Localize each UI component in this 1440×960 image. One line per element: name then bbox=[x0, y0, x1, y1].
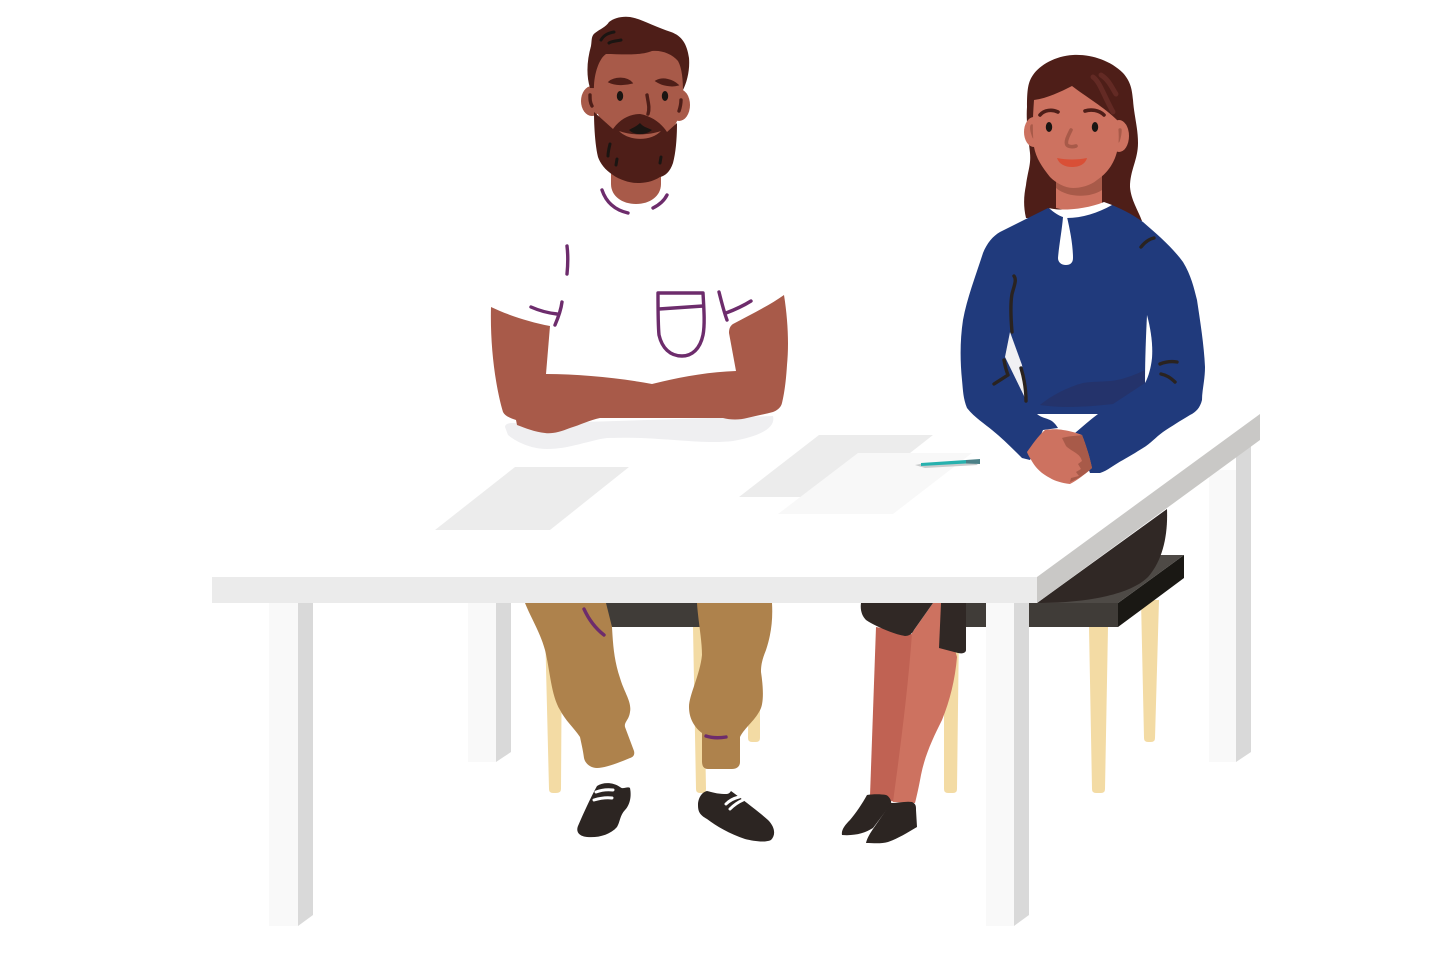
woman's thighs on seat bbox=[1037, 509, 1167, 603]
man: shirt details and pocket bbox=[531, 246, 751, 356]
back table legs bbox=[468, 440, 1251, 762]
man: left shoe bbox=[577, 783, 631, 837]
woman: shoes bbox=[842, 794, 917, 843]
eyes bbox=[617, 91, 623, 101]
man: trousers bbox=[525, 603, 772, 769]
man: arm shadow on table bbox=[505, 416, 773, 449]
woman: face bbox=[1033, 86, 1119, 188]
woman: ears bbox=[1024, 117, 1129, 152]
table bbox=[212, 300, 1260, 926]
table front edge bbox=[212, 577, 1037, 603]
front left leg bbox=[269, 603, 313, 926]
ears bbox=[581, 86, 603, 116]
woman: face features bbox=[1040, 75, 1116, 167]
chair seat: man bbox=[604, 603, 702, 627]
ear lines bbox=[590, 95, 681, 111]
man: arms bbox=[491, 295, 788, 433]
mouth bbox=[619, 131, 661, 139]
woman: hair bbox=[1024, 55, 1142, 221]
eyebrows bbox=[609, 78, 632, 84]
beard strands bbox=[608, 144, 661, 165]
man: right shoe bbox=[698, 791, 774, 842]
man: head bbox=[581, 17, 690, 183]
woman: neck bbox=[1056, 170, 1102, 213]
paper: front left bbox=[435, 467, 629, 530]
nose bbox=[647, 95, 649, 114]
woman: collar and keyhole bbox=[1049, 202, 1112, 265]
woman: jumper gaps bbox=[1005, 315, 1152, 402]
table top surface bbox=[212, 300, 1260, 577]
chair legs: woman bbox=[944, 600, 1159, 793]
face bbox=[594, 51, 683, 140]
paper: front right bbox=[778, 453, 972, 514]
paper: back right bbox=[739, 435, 933, 497]
chair seat: woman bbox=[960, 555, 1184, 627]
woman: jumper fold lines bbox=[994, 238, 1177, 401]
hair bbox=[587, 17, 689, 90]
woman: legs bbox=[870, 603, 957, 803]
woman: neck shadow bbox=[1056, 176, 1102, 196]
pen bbox=[915, 459, 980, 468]
man: shirt collar bbox=[602, 190, 667, 213]
man: trouser crease marks bbox=[584, 609, 726, 738]
woman: jumper bbox=[961, 203, 1205, 473]
front right leg bbox=[986, 603, 1029, 926]
table side edge bbox=[1037, 414, 1260, 603]
woman: hands bbox=[1027, 429, 1092, 484]
chair legs: man bbox=[545, 627, 760, 793]
man: neck bbox=[611, 165, 661, 204]
woman: jumper shadow bbox=[1040, 370, 1145, 407]
beard bbox=[594, 112, 677, 183]
woman: skirt bbox=[861, 603, 966, 653]
hair strands bbox=[601, 32, 621, 43]
